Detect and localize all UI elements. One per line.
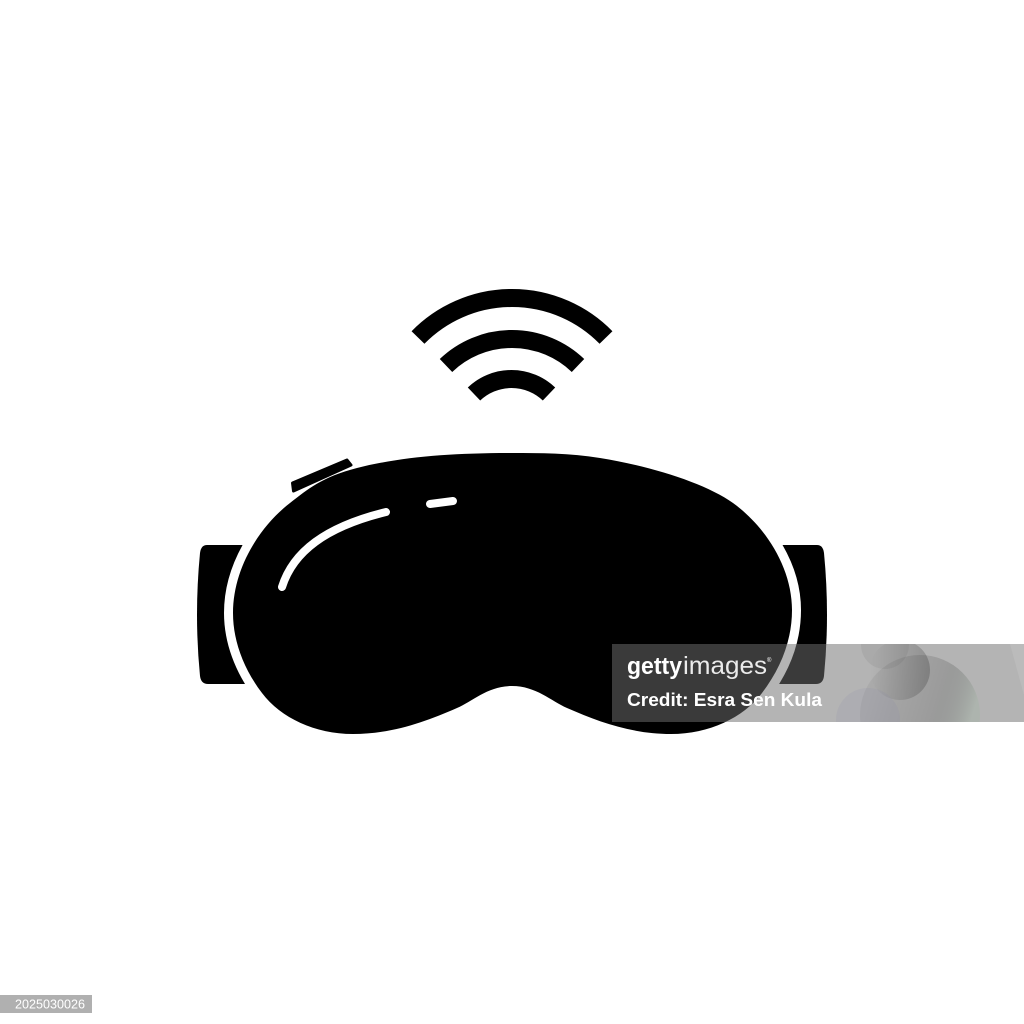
visor body: [233, 453, 792, 734]
right strap: [779, 545, 827, 684]
watermark banner: [612, 644, 1024, 722]
watermark logo: getty: [627, 653, 683, 680]
watermark credit: Credit: Esra Sen Kula: [627, 690, 823, 710]
image id tag: 2025030026: [15, 998, 85, 1012]
left strap: [197, 545, 245, 684]
visor highlight dash: [430, 501, 453, 504]
icon: wifi signal: [418, 298, 606, 394]
watermark logo: images: [683, 652, 767, 680]
watermark logo: [627, 652, 772, 680]
visor highlight curve: [282, 512, 386, 587]
image id tag: [0, 995, 92, 1013]
watermark logo: ®: [767, 657, 772, 664]
top button: [292, 460, 351, 491]
watermark bubbles: [860, 644, 977, 722]
icon: VR headset: [197, 453, 827, 734]
